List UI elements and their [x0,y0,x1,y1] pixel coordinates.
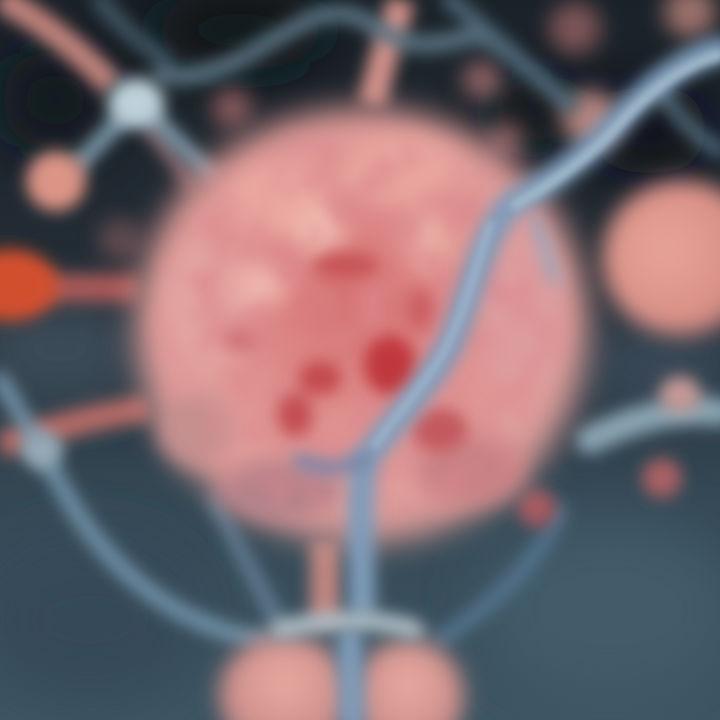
icon: left lower junction [21,431,63,469]
pink vessels [0,0,402,625]
right small nodes [518,376,701,527]
main blue vessel [280,50,720,720]
icon: left red cell [0,249,58,321]
cell red patches [222,252,468,452]
right cell [602,180,720,336]
icon: blue junction node [108,78,164,128]
icon: left small pink cell [26,151,86,211]
main cell [130,100,600,550]
cell texture [159,136,560,520]
cell mottling [189,151,552,498]
lower cells [219,635,464,720]
background pink blobs [98,0,716,262]
